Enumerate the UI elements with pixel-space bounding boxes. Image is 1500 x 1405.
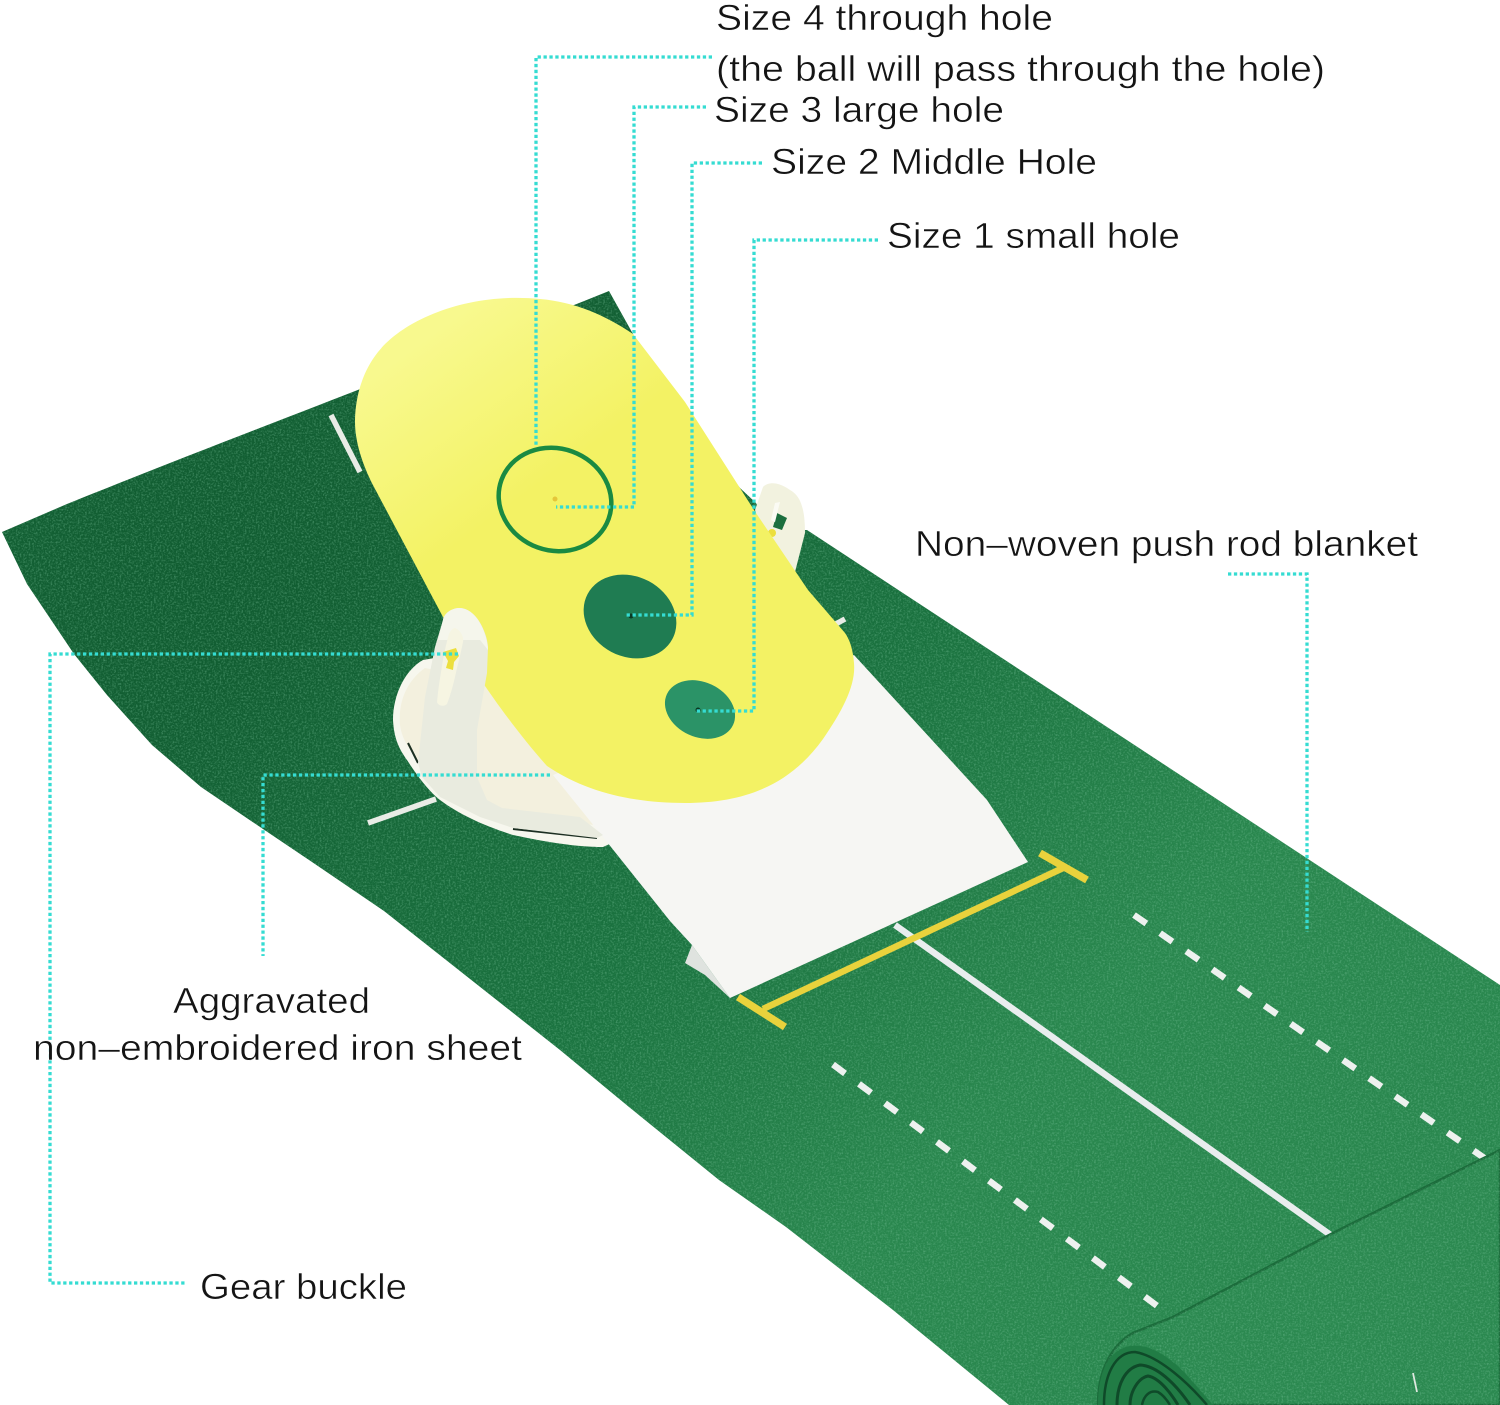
label: ball pass-through note: (the ball will pass through the hole) <box>716 48 1325 89</box>
leader: size 2 middle hole <box>626 163 762 615</box>
mat markings: centre white line <box>895 925 1332 1236</box>
size 4 centre dot <box>552 496 558 502</box>
rolled end of the mat <box>1090 1145 1500 1405</box>
leader: aggravated iron sheet <box>263 775 550 956</box>
left plastic gear clip <box>418 608 603 838</box>
mat markings: left dashed line <box>833 1064 1168 1314</box>
roller base: cream inner tray <box>400 668 600 825</box>
leader: size 4 through hole <box>536 57 712 445</box>
leader: non-woven push rod blanket <box>1228 574 1307 932</box>
label: size 3 large hole: Size 3 large hole <box>714 89 1004 130</box>
mat markings: white target cross lines <box>331 415 845 823</box>
iron sheet ramp: white <box>553 655 1028 998</box>
mat markings: right dashed line <box>1134 915 1490 1162</box>
yellow T marking <box>738 853 1087 1027</box>
yellow target plate <box>355 298 854 803</box>
size 1 small hole: green disc <box>655 669 745 750</box>
label: non-embroidered iron sheet: non–embroidered iron sheet <box>33 1027 522 1068</box>
label: size 2 middle hole: Size 2 Middle Hole <box>771 141 1097 182</box>
label: gear buckle: Gear buckle <box>200 1266 407 1307</box>
label: size 1 small hole: Size 1 small hole <box>887 215 1180 256</box>
right plastic clip <box>755 483 805 572</box>
leader: gear buckle <box>50 654 458 1283</box>
label: aggravated: Aggravated <box>173 980 370 1021</box>
roller base: dark slits <box>408 743 597 838</box>
hole centre marks <box>628 614 700 712</box>
leader: size 3 large hole <box>556 107 706 507</box>
leader: size 1 small hole <box>696 240 878 711</box>
roller base: white curved strip <box>393 650 640 847</box>
size 2 middle hole: green disc <box>569 559 691 674</box>
size 4 through hole: green ring <box>484 432 626 567</box>
label: non-woven push rod blanket: Non–woven push rod blanket <box>915 523 1418 564</box>
